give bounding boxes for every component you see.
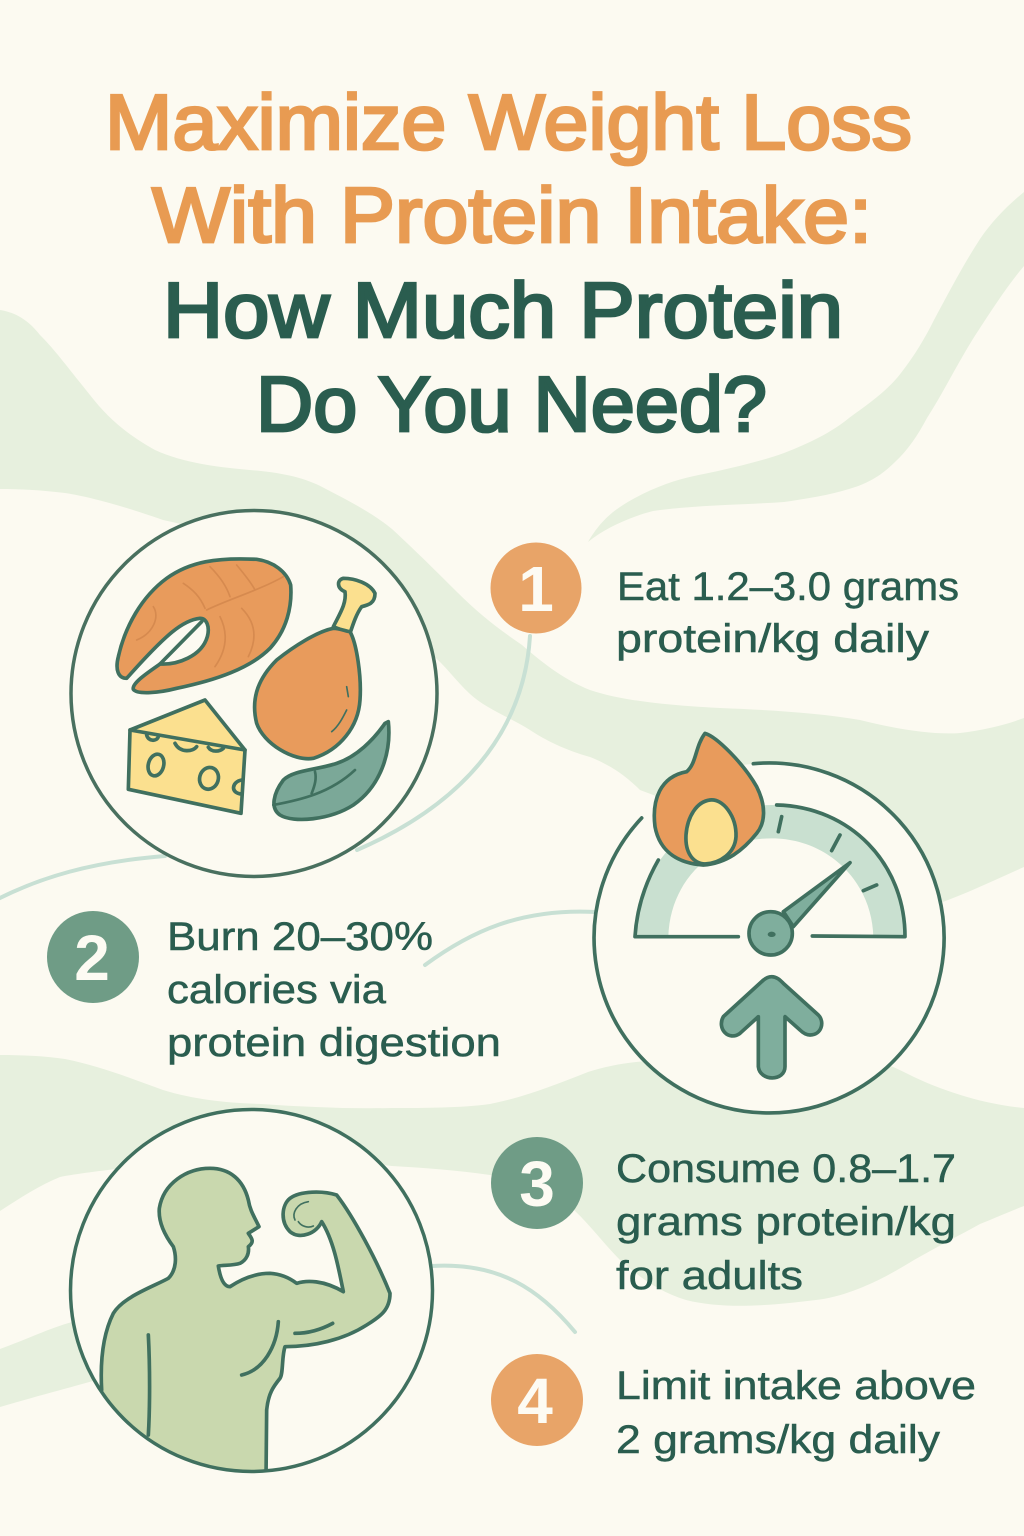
icon: cheese wedge (128, 700, 245, 813)
text: step 2: Burn 20–30% (167, 915, 433, 959)
title: orange heading: With Protein Intake: (152, 171, 872, 259)
text: step 4 (616, 1364, 976, 1462)
text: step 1 (616, 565, 959, 661)
icon: gauge (635, 805, 905, 955)
badge: number 3 (491, 1137, 583, 1229)
title: green heading: How Much Protein (163, 266, 843, 354)
title: green heading (163, 266, 843, 448)
title: orange heading (105, 78, 912, 259)
icon: flame (654, 733, 764, 865)
panel: flexing person circle (70, 1110, 432, 1480)
icon: spinach leaf (273, 722, 389, 819)
badge: number 4 (491, 1354, 583, 1446)
badge: number 3: 3 (519, 1148, 555, 1220)
badge: number 2 (47, 911, 139, 1003)
badge: number 2: 2 (74, 922, 110, 994)
connector: food circle to left edge (0, 856, 165, 898)
panel: protein foods circle (71, 510, 437, 876)
text: step 3: Consume 0.8–1.7 (616, 1147, 956, 1191)
text: step 3: grams protein/kg (616, 1200, 956, 1244)
title: green heading: Do You Need? (256, 360, 767, 448)
text: step 1: Eat 1.2–3.0 grams (617, 565, 959, 609)
text: step 3: for adults (616, 1254, 803, 1298)
connector: person circle to step 4 (432, 1266, 575, 1332)
title: orange heading: Maximize Weight Loss (105, 78, 912, 166)
text: step 4: Limit intake above (616, 1364, 976, 1408)
connector: step 1 to food circle (357, 636, 530, 850)
icon: chicken drumstick (255, 578, 375, 759)
text: step 3 (616, 1147, 956, 1298)
text: step 2 (167, 915, 501, 1065)
text: step 2: protein digestion (167, 1021, 501, 1065)
icon: up arrow (721, 977, 822, 1078)
connector: step 2 to meter circle (425, 912, 596, 965)
outer ring (70, 1110, 432, 1472)
badge: number 1 (490, 542, 582, 634)
badge: number 1: 1 (518, 553, 554, 625)
badge: number 4: 4 (517, 1365, 553, 1437)
panel: metabolism meter circle (594, 733, 944, 1113)
text: step 2: calories via (167, 968, 387, 1012)
text: step 1: protein/kg daily (616, 617, 929, 661)
outer ring (594, 763, 944, 1113)
icon: flexing person (87, 1168, 390, 1480)
text: step 4: 2 grams/kg daily (616, 1418, 940, 1462)
icon: salmon steak (117, 559, 291, 693)
